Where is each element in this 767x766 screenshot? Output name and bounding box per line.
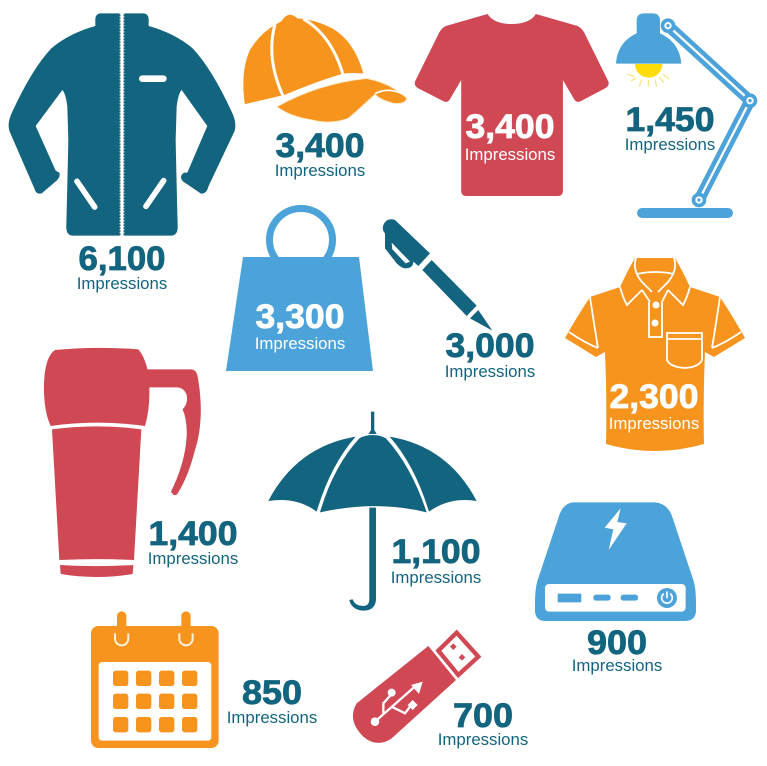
- icon: lamp base: [637, 208, 733, 218]
- label: 3,300 impressions: [255, 298, 345, 353]
- item: calendar: [91, 611, 317, 748]
- label: 3,000 impressions: [445, 327, 535, 381]
- icon: usb drive: [353, 633, 478, 743]
- icon: jacket: [9, 13, 235, 236]
- icon: power bank: [535, 502, 696, 621]
- label: 850 impressions: [227, 674, 317, 727]
- icon: polo shirt: [565, 258, 745, 451]
- label: 850 impressions: Impressions: [227, 708, 317, 727]
- item: t-shirt: [415, 14, 609, 196]
- icon: cap: [243, 15, 407, 122]
- item: pen: [383, 219, 535, 381]
- label: 3,300 impressions: Impressions: [255, 334, 345, 353]
- item: usb drive: [353, 633, 528, 749]
- item: cap: [243, 15, 407, 180]
- label: 1,400 impressions: Impressions: [148, 549, 238, 568]
- label: 850 impressions: 850: [242, 674, 302, 712]
- label: 1,450 impressions: [625, 101, 715, 154]
- label: 900 impressions: [572, 624, 662, 675]
- label: 3,400 impressions: 3,400: [466, 108, 554, 146]
- label: 1,450 impressions: 1,450: [626, 101, 714, 139]
- label: 6,100 impressions: 6,100: [78, 240, 166, 278]
- label: 700 impressions: 700: [453, 697, 513, 735]
- icon: pen: [383, 219, 492, 331]
- label: 3,400 impressions: [275, 127, 365, 180]
- label: 2,300 impressions: Impressions: [609, 414, 699, 433]
- icon: t-shirt: [415, 14, 609, 196]
- label: 700 impressions: Impressions: [438, 730, 528, 749]
- label: 700 impressions: [438, 697, 528, 749]
- item: jacket: [9, 13, 235, 293]
- label: 3,300 impressions: 3,300: [256, 298, 344, 336]
- label: 900 impressions: Impressions: [572, 656, 662, 675]
- icon: umbrella: [268, 412, 477, 611]
- item: desk lamp: [616, 13, 757, 218]
- label: 6,100 impressions: Impressions: [77, 274, 167, 293]
- icon: travel mug: [44, 348, 201, 577]
- label: 2,300 impressions: 2,300: [610, 378, 698, 416]
- label: 3,400 impressions: 3,400: [276, 127, 364, 165]
- item: power bank: [535, 502, 696, 675]
- label: 3,000 impressions: Impressions: [445, 362, 535, 381]
- label: 1,100 impressions: Impressions: [391, 568, 481, 587]
- item: umbrella: [268, 412, 481, 611]
- label: 2,300 impressions: [609, 378, 699, 433]
- icon: desk lamp: [616, 13, 757, 207]
- label: 900 impressions: 900: [587, 624, 647, 662]
- item: travel mug: [44, 348, 238, 577]
- icon: calendar: [91, 611, 219, 748]
- label: 1,100 impressions: 1,100: [392, 533, 480, 571]
- label: 1,400 impressions: 1,400: [148, 515, 238, 553]
- label: 1,400 impressions: [148, 515, 238, 568]
- item: tote bag: [226, 208, 373, 371]
- item: polo shirt: [565, 258, 745, 451]
- icon: tote bag: [226, 208, 373, 371]
- label: 3,400 impressions: [465, 108, 555, 164]
- label: 3,400 impressions: Impressions: [465, 145, 555, 164]
- label: 6,100 impressions: [77, 240, 167, 293]
- label: 3,000 impressions: 3,000: [446, 327, 534, 365]
- label: 1,450 impressions: Impressions: [625, 135, 715, 154]
- label: 1,100 impressions: [391, 533, 481, 587]
- label: 3,400 impressions: Impressions: [275, 161, 365, 180]
